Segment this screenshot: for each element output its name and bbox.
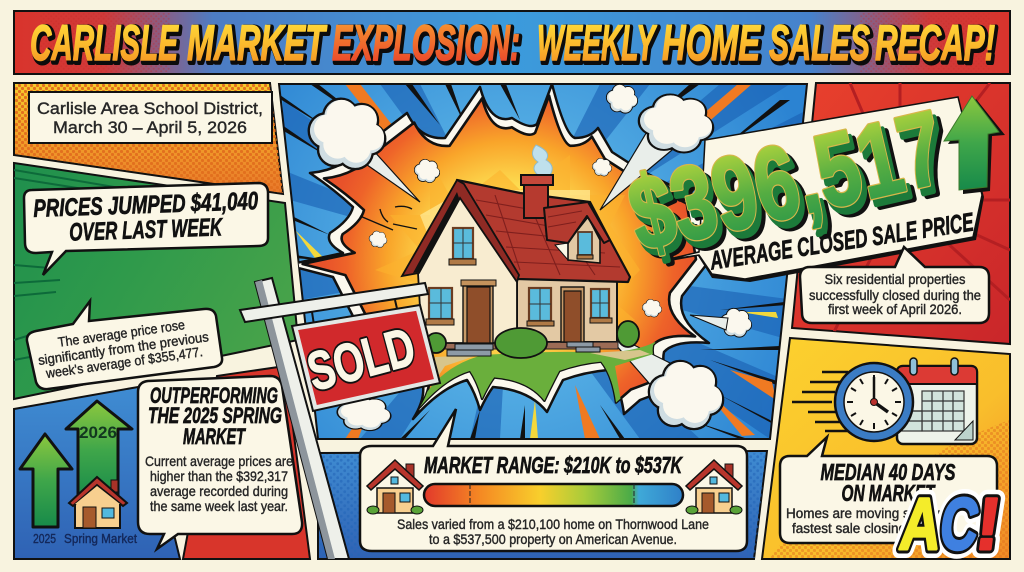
speed streak 1 (350, 139, 420, 202)
range text: Sales varied from a $210,100 home on Thornwood Lane (397, 516, 709, 532)
speech bubble: median days: fastest sale closing in (792, 521, 920, 536)
speech bubble: outperforming: THE 2025 SPRING (148, 403, 282, 428)
sign board (295, 308, 437, 408)
hangers (312, 300, 398, 325)
panel: date (14, 83, 283, 194)
arrow: price up (944, 96, 1005, 194)
range text (397, 516, 709, 547)
title text (30, 15, 997, 73)
speech bubble: detail: The average price rose (57, 317, 186, 350)
logo: AC!: A (896, 483, 946, 565)
panel: red backing (183, 366, 310, 559)
speech bubble: outperforming: Current average prices are (145, 453, 293, 469)
speech bubble: outperforming (138, 376, 302, 549)
logo: AC!: C (936, 483, 983, 565)
speech bubble: six properties (800, 247, 989, 323)
date text (37, 99, 263, 137)
panel: market range (318, 409, 767, 559)
speech bubble: detail (27, 301, 222, 389)
logo: AC!: ! (972, 483, 1005, 565)
speech bubble: median days: Homes are moving swiftly, (786, 506, 943, 521)
spring chart labels: Spring Market (64, 532, 137, 546)
range heading: MARKET RANGE: $210K to $537K (424, 452, 683, 478)
small puffs (369, 158, 662, 317)
roof (457, 180, 630, 282)
title text: EXPLOSION: (332, 15, 520, 71)
gable trim (402, 180, 519, 282)
range text: to a $537,500 property on American Avenue. (429, 531, 677, 547)
icon: chimney smoke (532, 145, 552, 175)
speed streak small (690, 315, 728, 330)
speech bubble: headline (24, 183, 268, 275)
sign text: SOLD (301, 317, 421, 403)
cloud bottom left (337, 396, 391, 430)
panel: explosion (279, 84, 807, 439)
title text: CARLISLE (30, 15, 179, 71)
window left (426, 288, 454, 325)
date text: Carlisle Area School District, (37, 99, 263, 118)
title text: SALES (771, 17, 872, 73)
icon: calendar (897, 358, 977, 444)
sign text (301, 317, 421, 403)
logo: AC! (896, 483, 1005, 565)
window gable (449, 228, 476, 265)
spring chart labels (33, 532, 137, 546)
panel: price jump (14, 163, 298, 399)
post (255, 278, 349, 559)
icon: high house (686, 460, 742, 514)
dormer (544, 202, 610, 263)
speed lines (792, 372, 852, 431)
title text: MARKET (189, 17, 330, 73)
cloud 2 (639, 95, 713, 152)
roof tiles (476, 195, 620, 275)
title text: HOME (662, 15, 761, 71)
door right (561, 287, 584, 342)
panel: days on market (762, 338, 1010, 559)
bushes (426, 321, 639, 358)
speech bubble: outperforming: OUTPERFORMING (150, 383, 278, 408)
lawn (420, 342, 656, 407)
speech bubble: median days: MEDIAN 40 DAYS (820, 459, 956, 485)
speech bubble: headline: OVER LAST WEEK (69, 213, 224, 247)
icon: low house (367, 460, 423, 514)
speed streak 2 (600, 130, 672, 210)
price banner face (665, 97, 982, 279)
icon: clock (835, 363, 913, 441)
speech bubble: six properties: first week of April 2026. (828, 302, 962, 317)
icon: house (69, 477, 127, 528)
panel: average price (619, 83, 1010, 344)
window right (590, 289, 612, 323)
door left (461, 280, 496, 343)
wing walls (517, 278, 617, 342)
title banner (14, 11, 1010, 74)
speech bubble: headline: PRICES JUMPED $41,040 (33, 187, 259, 223)
logo: AC!: C (936, 483, 983, 565)
arrow: 2026 (66, 401, 132, 500)
gable trim shadow (413, 192, 459, 273)
title text: WEEKLY (539, 17, 660, 73)
sign outline (292, 305, 440, 411)
window middle (527, 288, 554, 326)
speech bubble: median days: ON MARKET (842, 480, 936, 506)
title text: SALES (769, 15, 870, 71)
speech bubble: detail: week's average of $355,477. (44, 344, 204, 381)
steps (447, 342, 600, 356)
arrow: 2026: 2026 (79, 423, 117, 442)
speech bubble: median days (780, 437, 997, 543)
spring chart labels: 2025 (33, 532, 56, 546)
speech bubble: outperforming: MARKET (183, 424, 246, 449)
small cloud right (720, 308, 752, 337)
speech bubble: outperforming: the same week last year. (150, 498, 288, 514)
cloud 3 (649, 361, 723, 429)
logo: AC!: A (896, 483, 946, 565)
house (400, 175, 660, 425)
title text: CARLISLE (32, 17, 181, 73)
logo: AC!: C (936, 483, 983, 565)
logo: AC!: ! (972, 483, 1005, 565)
speech bubble: outperforming: average recorded during (150, 483, 288, 499)
title text: EXPLOSION: (334, 17, 522, 73)
speech bubble: detail: significantly from the previous (37, 329, 210, 368)
speed streak 3 (602, 329, 688, 405)
speech bubble: outperforming: higher than the $392,317 (150, 468, 288, 484)
speech bubble: six properties: Six residential properties (824, 272, 966, 287)
cloud 1 (309, 99, 385, 169)
speech bubble: six properties: successfully closed during the (809, 288, 981, 303)
starburst (287, 84, 710, 419)
gable wall (418, 196, 517, 343)
chimney (521, 175, 553, 218)
small cloud top (606, 84, 638, 113)
sign text: SOLD (301, 317, 421, 403)
arm (240, 283, 428, 322)
lawn paths (435, 350, 650, 378)
logo: AC!: ! (972, 483, 1005, 565)
title text: HOME (664, 17, 763, 73)
SOLD sign (240, 278, 440, 559)
title text: WEEKLY (537, 15, 658, 71)
price banner (665, 97, 984, 282)
foundation (445, 342, 618, 349)
panel: spring comparison (14, 376, 302, 559)
range bar (424, 484, 683, 506)
date text: March 30 – April 5, 2026 (53, 118, 247, 137)
arrow: 2025 (20, 434, 72, 527)
title text: MARKET (187, 15, 328, 71)
logo: AC!: A (896, 483, 946, 565)
